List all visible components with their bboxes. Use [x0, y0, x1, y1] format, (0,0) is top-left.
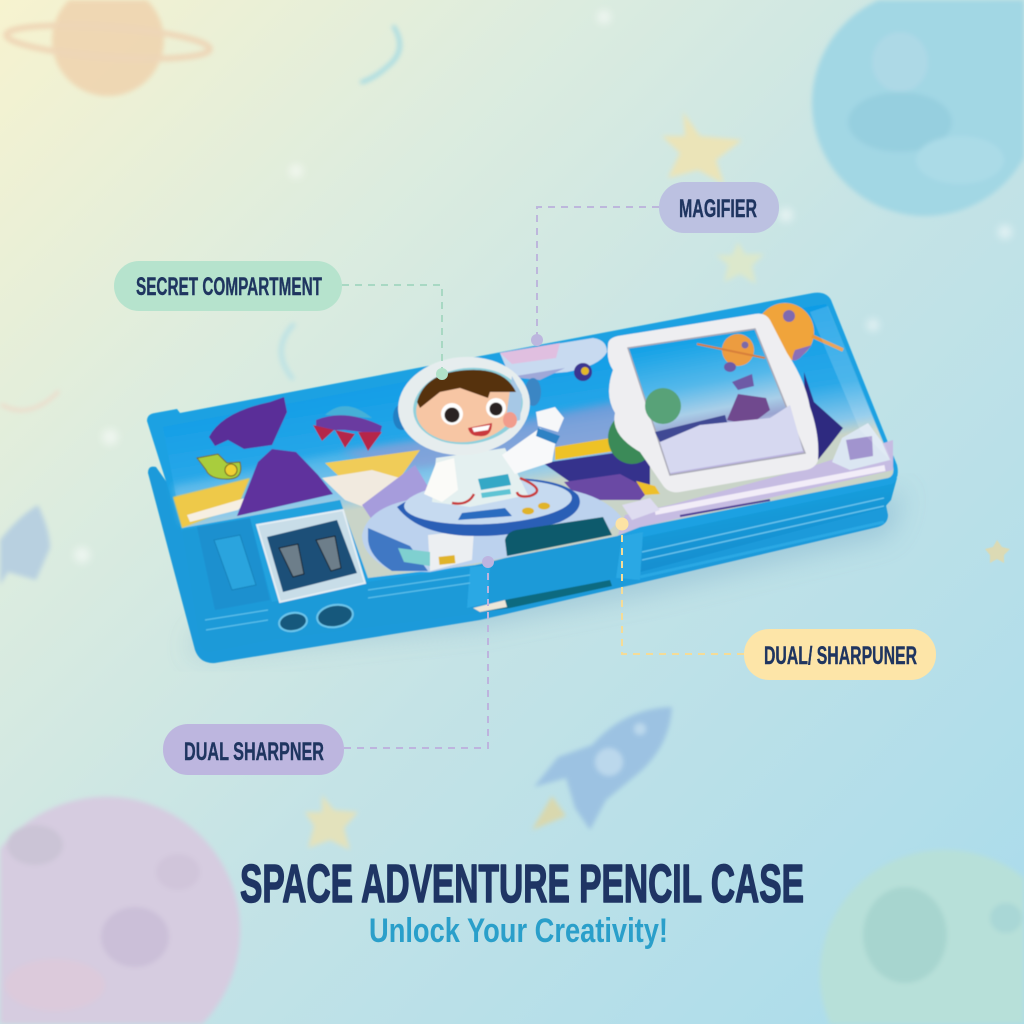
blush sky: [505, 376, 522, 425]
hair: [417, 370, 516, 408]
pencil case: [147, 293, 905, 663]
planet: green bottom right: [820, 850, 1024, 1024]
art: dark purple band: [543, 448, 650, 490]
hull dark left: [368, 528, 428, 571]
ring top: [403, 476, 573, 528]
art: yellow band left: [173, 478, 250, 528]
art: spaceship: [362, 476, 622, 572]
lower wall ridges: [205, 575, 470, 630]
sparkles: [74, 10, 1012, 563]
window: ringed planet: [697, 334, 765, 366]
sharpener holes: [278, 602, 355, 633]
torso: [432, 448, 528, 507]
clear lid: [257, 510, 365, 602]
face: [412, 368, 520, 448]
art: ground highlights: [622, 468, 885, 520]
art: small ufo: [313, 406, 382, 451]
art: purple mountain: [237, 449, 333, 516]
subtitle: Unlock Your Creativity!: [369, 912, 668, 950]
button: [214, 535, 256, 590]
magnifier window picture: [628, 329, 805, 475]
left wall front: [182, 500, 480, 652]
pencil: [473, 580, 612, 612]
rocket: left small: [0, 505, 50, 585]
button frame: [197, 518, 270, 610]
lid rim: [147, 293, 898, 582]
art: green planet: [608, 412, 656, 464]
clasp right edge: [616, 532, 643, 580]
callout lines: [342, 207, 744, 748]
base flange: [148, 467, 888, 663]
window: green planet: [645, 388, 681, 424]
art: dark rock right: [804, 372, 843, 460]
chest panel: [478, 474, 511, 490]
art: lavender ground right: [618, 440, 893, 535]
blades: [279, 536, 341, 577]
leader: magnifier: [537, 207, 659, 340]
art: comet: [197, 454, 241, 479]
art: white ground left: [187, 496, 252, 522]
callout: magifier: [659, 182, 779, 233]
leader: dual sharpuner: [622, 524, 744, 654]
well: [267, 520, 357, 592]
art: purple rock top: [209, 397, 287, 449]
callout: dual sharpner: [163, 724, 344, 775]
compartment frame: [250, 500, 367, 602]
rocket: large blue: [532, 707, 672, 830]
art: lavender rock centre: [362, 465, 430, 525]
ear right: [525, 378, 541, 406]
art: sky haze: [172, 410, 640, 525]
art: peach ground centre: [322, 470, 400, 510]
wall ridges: [640, 498, 884, 577]
art: purple horizon mid: [340, 400, 640, 470]
callout: dual sharpner: DUAL SHARPNER: [184, 738, 324, 766]
star: top: [662, 112, 742, 184]
sharpener block: [197, 500, 470, 633]
callout: secret compartment: SECRET COMPARTMENT: [136, 273, 322, 301]
art: astronaut: [393, 351, 564, 507]
clasp dark tab: [505, 517, 612, 556]
eyes: [441, 398, 506, 425]
case shadow: [190, 490, 905, 655]
clasp edge: [467, 565, 490, 608]
art: purple rock low: [564, 474, 650, 500]
callout: secret compartment: [114, 261, 342, 311]
window: moon ground: [660, 405, 803, 473]
anchor dots: [436, 334, 628, 568]
callout: dual sharpuner: DUAL/ SHARPUNER: [764, 642, 917, 670]
dash blue: [458, 508, 512, 520]
hull lower: [362, 488, 622, 572]
planet: lilac bottom left: [0, 797, 240, 1024]
art: airplane: [500, 338, 607, 381]
left arm: [424, 458, 458, 502]
planet: blue top right: [812, 0, 1024, 216]
window: dark band: [655, 415, 730, 442]
leader: secret compartment: [342, 285, 442, 374]
waving arm: [502, 428, 556, 474]
planet: ringed top left: [5, 0, 211, 96]
right side wall: [640, 478, 897, 572]
art: white crater right: [832, 423, 890, 470]
callout: magifier: MAGIFIER: [679, 195, 757, 223]
art: yellow band centre: [325, 450, 420, 482]
cheek: [503, 412, 517, 428]
hull white panel: [428, 530, 474, 571]
helmet: [394, 351, 534, 461]
comet arc marks: [2, 27, 400, 410]
hand: [536, 407, 564, 432]
leader: dual sharpner: [344, 562, 488, 748]
wrist: [536, 428, 560, 444]
clasp body: [467, 532, 643, 608]
lid art: [163, 304, 893, 578]
mouth: [468, 423, 492, 436]
window: rocks: [724, 362, 770, 425]
art: orange planet right: [756, 303, 843, 361]
art: yellow small: [636, 481, 660, 495]
magnifier window frame: [608, 314, 818, 492]
star: small mid: [716, 242, 764, 284]
ear: [393, 404, 411, 430]
red hoses: [452, 478, 537, 504]
art: glossy sheen right: [810, 306, 892, 462]
star: right small: [985, 540, 1010, 563]
star: bottom: [305, 795, 358, 850]
art: yellow horizon: [555, 437, 622, 460]
visor: [409, 362, 527, 450]
hull teal strip: [398, 548, 430, 566]
callout: dual sharpuner: [744, 629, 936, 680]
yellow knobs: [439, 502, 550, 565]
ring: [397, 478, 580, 536]
